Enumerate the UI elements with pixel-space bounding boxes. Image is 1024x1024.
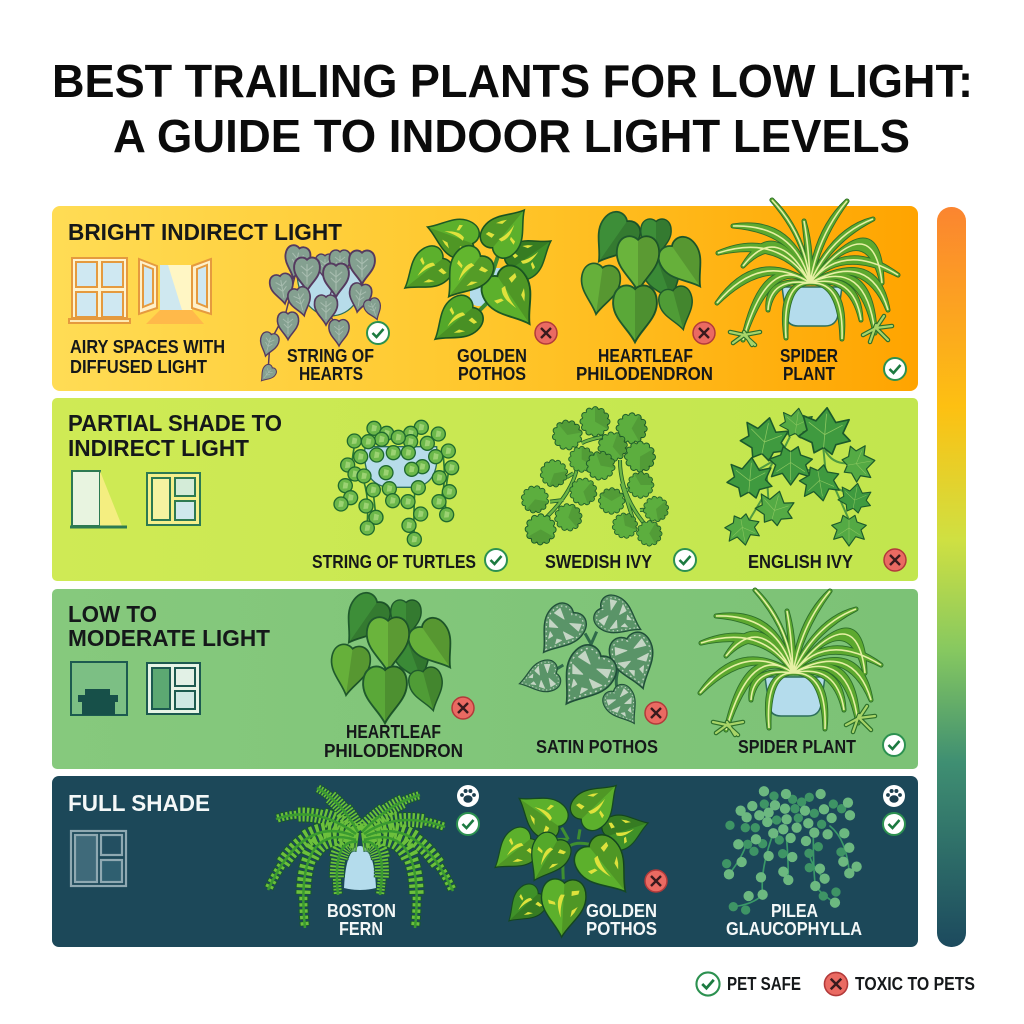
label: spider plant bbox=[780, 346, 838, 384]
plant: heartleaf philodendron bbox=[577, 207, 717, 342]
icon: pet safe bbox=[883, 734, 905, 756]
icon: dark window bbox=[71, 831, 126, 886]
icon: window with light wedge bbox=[70, 471, 127, 527]
text: airy spaces description: AIRY SPACES WITH bbox=[70, 337, 225, 357]
label: heartleaf philodendron bbox=[576, 346, 713, 384]
panel: partial shade to indirect light bbox=[52, 398, 918, 581]
icon: paw bbox=[883, 785, 905, 807]
heading: partial shade: INDIRECT LIGHT bbox=[68, 435, 249, 461]
plant: golden pothos bbox=[393, 197, 562, 355]
label: string of hearts bbox=[287, 346, 374, 384]
title: BEST TRAILING PLANTS FOR LOW LIGHT: bbox=[52, 55, 973, 107]
icon: window bbox=[147, 473, 200, 525]
label: golden pothos: POTHOS bbox=[458, 364, 526, 384]
label: spider plant: SPIDER bbox=[780, 346, 838, 366]
legend text: pet safe: PET SAFE bbox=[727, 974, 801, 994]
plant: boston fern bbox=[268, 788, 453, 928]
label: heartleaf philodendron: HEARTLEAF bbox=[598, 346, 693, 366]
label: golden pothos: POTHOS bbox=[586, 919, 657, 939]
label: boston fern: BOSTON bbox=[327, 901, 396, 921]
icon: room with sofa bbox=[71, 662, 127, 715]
icon: toxic bbox=[645, 870, 667, 892]
label: boston fern bbox=[327, 901, 396, 939]
heading: low to moderate: LOW TO bbox=[68, 601, 157, 627]
plant: spider plant bbox=[700, 590, 881, 735]
label: pilea glaucophylla bbox=[726, 901, 862, 939]
heading: partial shade: PARTIAL SHADE TO bbox=[68, 410, 282, 436]
heading: partial shade bbox=[68, 410, 282, 461]
legend icon: pet safe bbox=[696, 972, 720, 996]
icon: toxic bbox=[452, 697, 474, 719]
heading: full shade: FULL SHADE bbox=[68, 790, 210, 816]
icon: toxic bbox=[645, 702, 667, 724]
legend text: toxic to pets: TOXIC TO PETS bbox=[855, 974, 975, 994]
label: spider plant: SPIDER PLANT bbox=[738, 737, 856, 757]
legend icon: toxic bbox=[824, 972, 848, 996]
icon: toxic bbox=[693, 322, 715, 344]
icon: toxic bbox=[535, 322, 557, 344]
icon: pet safe bbox=[884, 358, 906, 380]
icon: pet safe bbox=[883, 813, 905, 835]
label: string of hearts: HEARTS bbox=[299, 364, 363, 384]
label: pilea glaucophylla: PILEA bbox=[771, 901, 818, 921]
label: golden pothos bbox=[586, 901, 657, 939]
label: heartleaf philodendron: PHILODENDRON bbox=[324, 741, 463, 761]
plant: string of turtles bbox=[334, 420, 459, 546]
panel: full shade bbox=[52, 771, 918, 947]
label: spider plant: PLANT bbox=[783, 364, 835, 384]
label: golden pothos: GOLDEN bbox=[586, 901, 657, 921]
plant: pilea glaucophylla bbox=[727, 791, 857, 910]
icon: pet safe bbox=[457, 813, 479, 835]
label: satin pothos: SATIN POTHOS bbox=[536, 737, 658, 757]
icon: closed window bbox=[69, 258, 130, 323]
label: boston fern: FERN bbox=[339, 919, 383, 939]
label: string of hearts: STRING OF bbox=[287, 346, 374, 366]
title bbox=[52, 55, 973, 162]
icon: pet safe bbox=[674, 549, 696, 571]
title: A GUIDE TO INDOOR LIGHT LEVELS bbox=[113, 110, 910, 162]
plant: swedish ivy bbox=[521, 408, 673, 549]
label: pilea glaucophylla: GLAUCOPHYLLA bbox=[726, 919, 862, 939]
panel: low to moderate light bbox=[52, 588, 918, 769]
heading: low to moderate: MODERATE LIGHT bbox=[68, 625, 270, 651]
heading: bright indirect light: BRIGHT INDIRECT LIGHT bbox=[68, 219, 342, 245]
plant: golden pothos bbox=[483, 771, 654, 938]
legend bbox=[696, 972, 975, 996]
plant: heartleaf philodendron bbox=[327, 588, 467, 723]
heading: low to moderate bbox=[68, 601, 270, 651]
label: string of turtles: STRING OF TURTLES bbox=[312, 552, 476, 572]
panel: bright indirect light bbox=[52, 197, 918, 391]
icon: pet safe bbox=[367, 322, 389, 344]
label: golden pothos: GOLDEN bbox=[457, 346, 527, 366]
icon: window bbox=[147, 663, 200, 714]
plant: string of hearts bbox=[256, 244, 385, 385]
label: heartleaf philodendron: PHILODENDRON bbox=[576, 364, 713, 384]
label: heartleaf philodendron: HEARTLEAF bbox=[346, 722, 441, 742]
icon: pet safe bbox=[485, 549, 507, 571]
light level gradient bar bbox=[937, 207, 966, 947]
label: golden pothos bbox=[457, 346, 527, 384]
plant: english ivy bbox=[723, 405, 878, 548]
label: english ivy: ENGLISH IVY bbox=[748, 552, 853, 572]
plant: satin pothos bbox=[515, 591, 664, 732]
icon: toxic bbox=[884, 549, 906, 571]
icon: paw bbox=[457, 785, 479, 807]
icon: open window with sunlight bbox=[139, 259, 211, 324]
label: heartleaf philodendron bbox=[324, 722, 463, 761]
label: swedish ivy: SWEDISH IVY bbox=[545, 552, 652, 572]
text: airy spaces description: DIFFUSED LIGHT bbox=[70, 357, 207, 377]
plant: spider plant bbox=[717, 200, 898, 345]
text: airy spaces description bbox=[70, 337, 225, 377]
